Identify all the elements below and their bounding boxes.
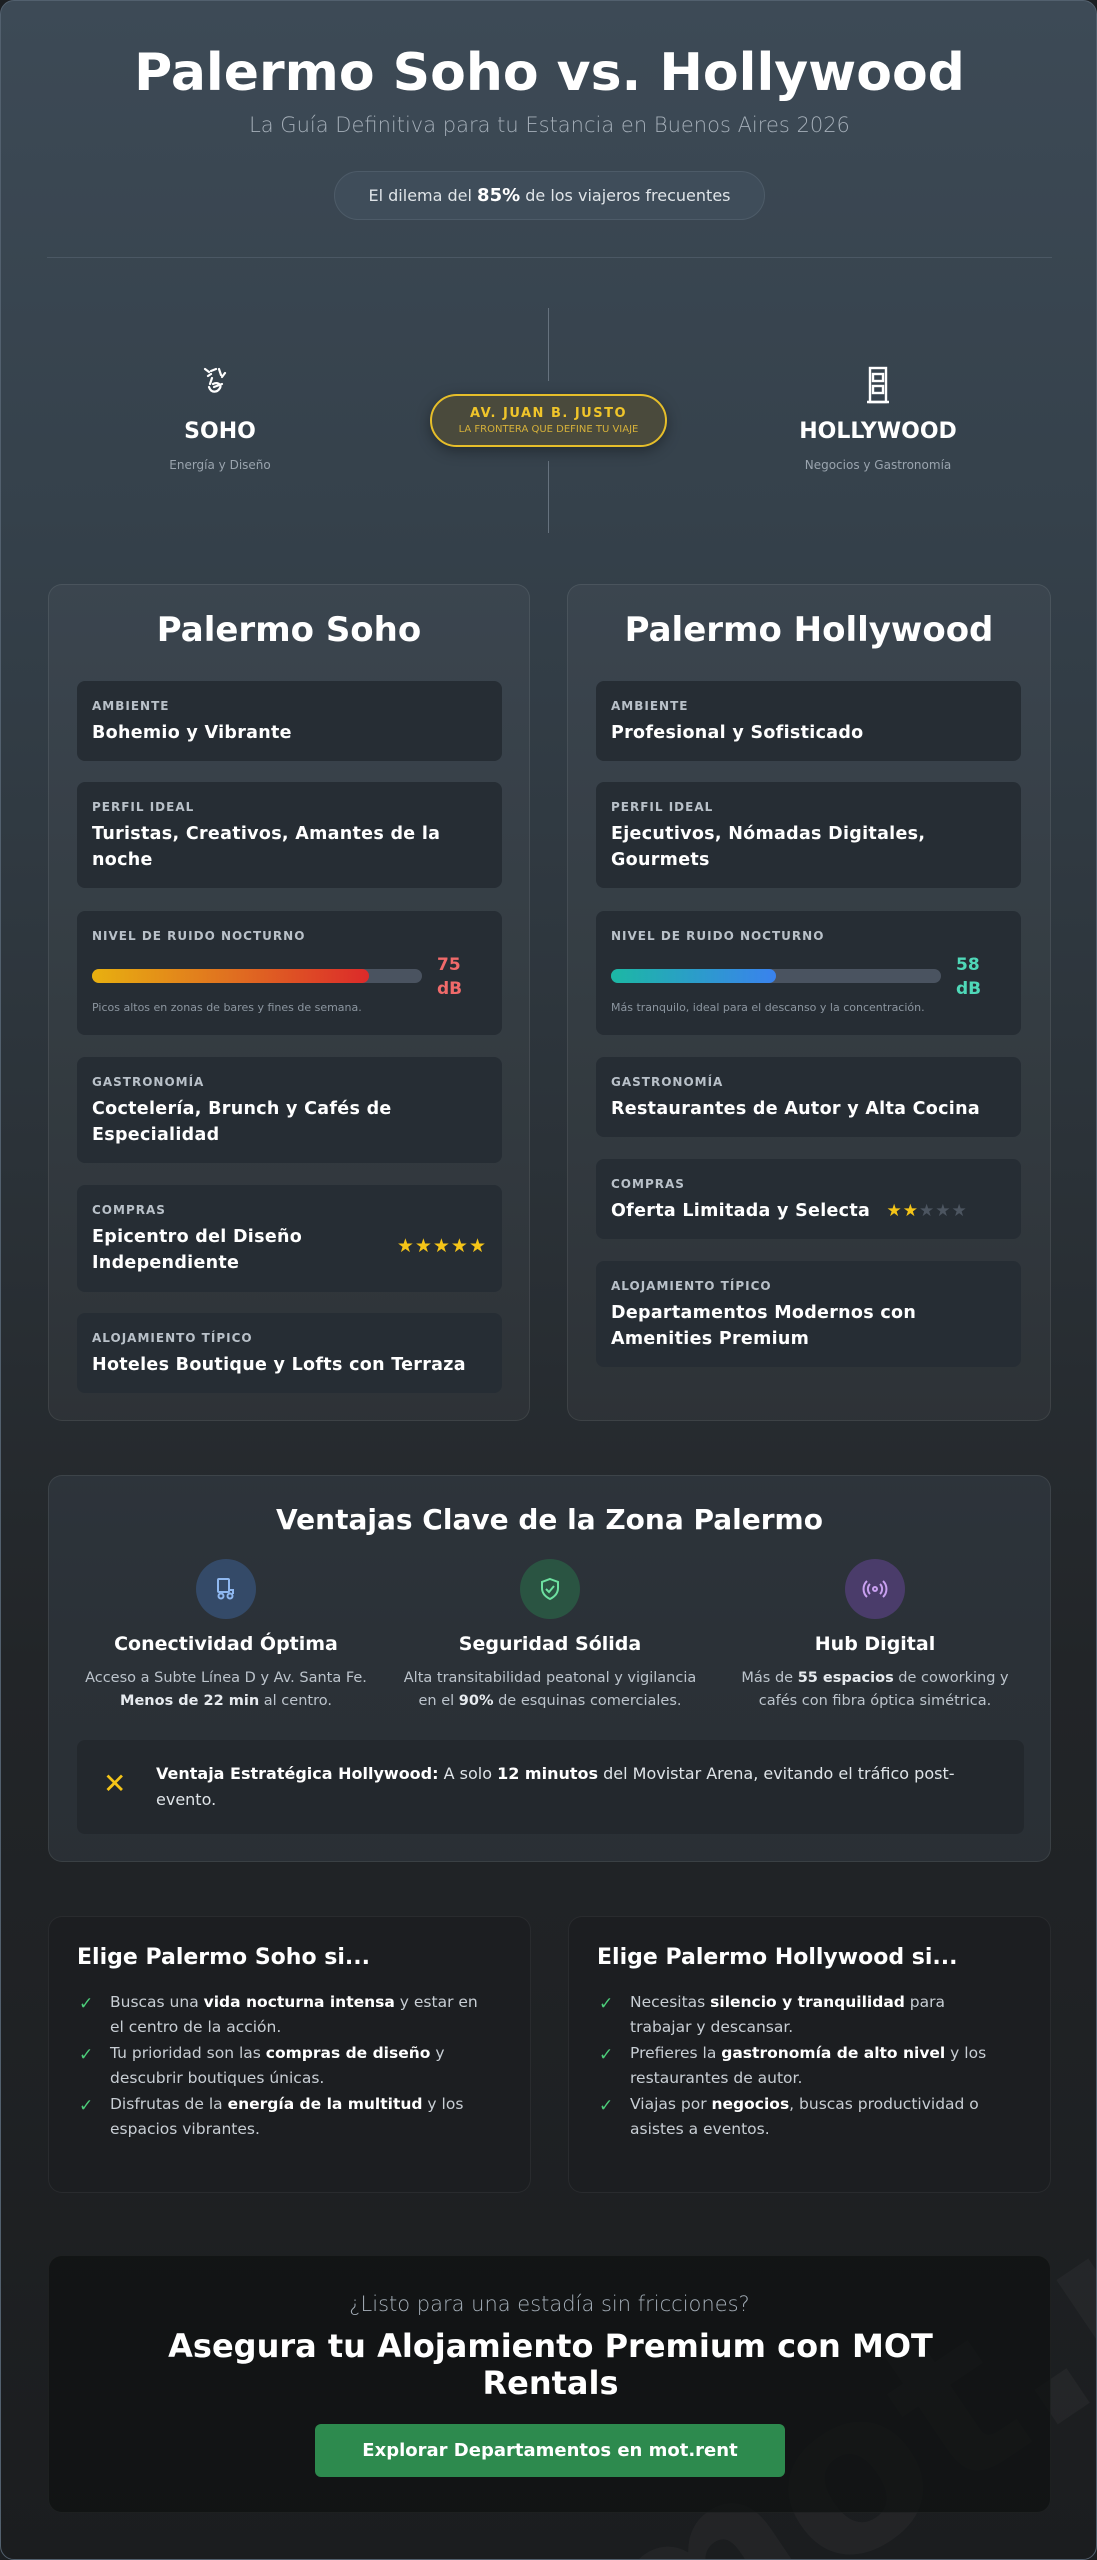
zone: hollywood: HOLLYWOOD <box>799 419 957 444</box>
feature: conectividad: Acceso a Subte Línea D y Av. Santa Fe. <box>85 1670 367 1686</box>
feature: seguridad: en el 90% de esquinas comerciales. <box>418 1693 682 1709</box>
cta button: Explorar Departamentos en mot.rent <box>362 2440 738 2461</box>
panel: elige hollywood: Prefieres la gastronomía de alto nivel y los restaurantes de autor. <box>630 2044 986 2087</box>
feature: conectividad: Menos de 22 min al centro. <box>120 1693 332 1709</box>
cta question: ¿Listo para una estadía sin fricciones? <box>349 2292 750 2316</box>
panel: elige soho <box>48 1916 531 2193</box>
cta button <box>315 2424 785 2477</box>
cta heading: Asegura tu Alojamiento Premium con MOT <box>168 2327 933 2365</box>
box: ruido: Picos altos en zonas de bares y fines de semana. <box>92 1001 362 1014</box>
panel: ventajas clave <box>48 1475 1051 1862</box>
box: ruido: 58 <box>956 955 980 975</box>
panel: palermo soho <box>48 584 530 1421</box>
box: alojamiento: ALOJAMIENTO TÍPICO <box>611 1279 772 1293</box>
box: compras: COMPRAS <box>92 1203 166 1217</box>
box: perfil: PERFIL IDEAL <box>611 800 713 814</box>
box: gastronomia <box>596 1057 1021 1137</box>
panel: elige soho: ✓ <box>79 2096 93 2116</box>
panel: elige hollywood: Necesitas silencio y tranquilidad para trabajar y descansar. <box>630 1993 945 2036</box>
feature: seguridad: Seguridad Sólida <box>459 1633 641 1655</box>
panel: cta <box>48 2255 1051 2513</box>
feature: conectividad: Conectividad Óptima <box>114 1633 338 1655</box>
stat pill <box>334 171 765 220</box>
box: gastronomia: GASTRONOMÍA <box>611 1075 723 1089</box>
icon: building <box>867 366 889 404</box>
box: ruido: NIVEL DE RUIDO NOCTURNO <box>92 929 305 943</box>
panel: elige soho: Elige Palermo Soho si... <box>77 1945 370 1970</box>
zone: soho <box>169 368 271 472</box>
box: ambiente: AMBIENTE <box>611 699 688 713</box>
cta heading <box>168 2327 933 2402</box>
box: ruido <box>596 911 1021 1035</box>
box: perfil <box>596 782 1021 888</box>
box: compras <box>77 1185 502 1292</box>
noise bar 58 dB <box>611 969 941 983</box>
box: compras: Epicentro del Diseño Independiente <box>92 1227 302 1273</box>
box: compras <box>596 1159 1021 1239</box>
heading: Ventajas Clave de la Zona Palermo <box>276 1503 823 1536</box>
icon: train <box>196 1559 256 1619</box>
box: alojamiento: Departamentos Modernos con Amenities Premium <box>611 1303 916 1349</box>
box: perfil <box>77 782 502 888</box>
zone: soho: Energía y Diseño <box>169 458 271 472</box>
panel: elige soho: ✓ <box>79 2045 93 2065</box>
panel: palermo soho: Palermo Soho <box>157 610 421 650</box>
badge: av juan b justo: AV. JUAN B. JUSTO <box>470 406 627 421</box>
panel: elige soho: Tu prioridad son las compras de diseño y descubrir boutiques únicas. <box>110 2044 445 2087</box>
feature: hub digital: Hub Digital <box>815 1633 935 1655</box>
feature: seguridad: Alta transitabilidad peatonal y vigilancia <box>404 1670 696 1686</box>
feature: hub digital: Más de 55 espacios de coworking y <box>741 1670 1009 1686</box>
box: ruido: dB <box>956 979 981 999</box>
box: ruido: Más tranquilo, ideal para el descanso y la concentración. <box>611 1001 925 1014</box>
callout: hollywood advantage <box>77 1740 1024 1834</box>
box: compras: ★★★★★ <box>397 1235 487 1257</box>
callout: hollywood advantage: Ventaja Estratégica Hollywood: A solo 12 minutos del Movistar Arena, evitando el tráfico post-evento. <box>156 1764 954 1809</box>
box: gastronomia: Coctelería, Brunch y Cafés de Especialidad <box>92 1099 392 1145</box>
feature: seguridad <box>404 1559 696 1709</box>
box: ambiente: Bohemio y Vibrante <box>92 723 292 743</box>
zone: soho: SOHO <box>184 419 256 444</box>
panel: elige hollywood: ✓ <box>599 2045 613 2065</box>
panel: palermo hollywood <box>567 584 1051 1421</box>
box: gastronomia: GASTRONOMÍA <box>92 1075 204 1089</box>
box: perfil: Ejecutivos, Nómadas Digitales, Gourmets <box>611 824 925 870</box>
box: alojamiento <box>77 1313 502 1393</box>
panel: elige hollywood: ✓ <box>599 1994 613 2014</box>
box: perfil: Turistas, Creativos, Amantes de la noche <box>92 824 440 870</box>
box: ambiente <box>596 681 1021 761</box>
badge: av juan b justo <box>430 394 667 447</box>
feature: conectividad <box>85 1559 367 1709</box>
noise bar 75 dB <box>92 969 422 983</box>
subtitle: La Guía Definitiva para tu Estancia en Buenos Aires 2026 <box>249 113 850 137</box>
panel: elige hollywood: Viajas por negocios, buscas productividad o asistes a eventos. <box>630 2095 979 2138</box>
box: alojamiento: ALOJAMIENTO TÍPICO <box>92 1331 253 1345</box>
panel: elige hollywood: Elige Palermo Hollywood si... <box>597 1945 957 1970</box>
callout: hollywood advantage: ✕ <box>103 1767 126 1800</box>
box: ruido: NIVEL DE RUIDO NOCTURNO <box>611 929 824 943</box>
box: ambiente: AMBIENTE <box>92 699 169 713</box>
box: ambiente: Profesional y Sofisticado <box>611 723 864 743</box>
panel: elige hollywood: ✓ <box>599 2096 613 2116</box>
icon: broadcast <box>845 1559 905 1619</box>
box: alojamiento <box>596 1261 1021 1367</box>
cta heading: Rentals <box>482 2364 619 2402</box>
badge: av juan b justo: LA FRONTERA QUE DEFINE TU VIAJE <box>459 424 638 435</box>
box: compras: Oferta Limitada y Selecta ★★★★★ <box>611 1201 968 1221</box>
divider map <box>169 308 957 533</box>
panel: elige hollywood <box>568 1916 1051 2193</box>
stat pill: El dilema del 85% de los viajeros frecuentes <box>368 185 730 206</box>
box: ambiente <box>77 681 502 761</box>
icon: soho palette <box>204 368 226 393</box>
panel: elige soho: Buscas una vida nocturna intensa y estar en el centro de la acción. <box>110 1993 478 2036</box>
box: ruido <box>77 911 502 1035</box>
box: ruido: 75 <box>437 955 461 975</box>
box: ruido: dB <box>437 979 462 999</box>
box: alojamiento: Hoteles Boutique y Lofts con Terraza <box>92 1355 466 1375</box>
panel: elige soho: Disfrutas de la energía de la multitud y los espacios vibrantes. <box>110 2095 463 2138</box>
icon: shield <box>520 1559 580 1619</box>
box: gastronomia: Restaurantes de Autor y Alta Cocina <box>611 1099 980 1119</box>
panel: elige soho: ✓ <box>79 1994 93 2014</box>
box: perfil: PERFIL IDEAL <box>92 800 194 814</box>
feature: hub digital <box>741 1559 1009 1709</box>
feature: hub digital: cafés con fibra óptica simétrica. <box>759 1693 991 1709</box>
title: Palermo Soho vs. Hollywood <box>134 43 965 103</box>
panel: palermo hollywood: Palermo Hollywood <box>625 610 993 650</box>
box: compras: COMPRAS <box>611 1177 685 1191</box>
box: gastronomia <box>77 1057 502 1163</box>
zone: hollywood <box>799 366 957 472</box>
zone: hollywood: Negocios y Gastronomía <box>805 458 951 472</box>
